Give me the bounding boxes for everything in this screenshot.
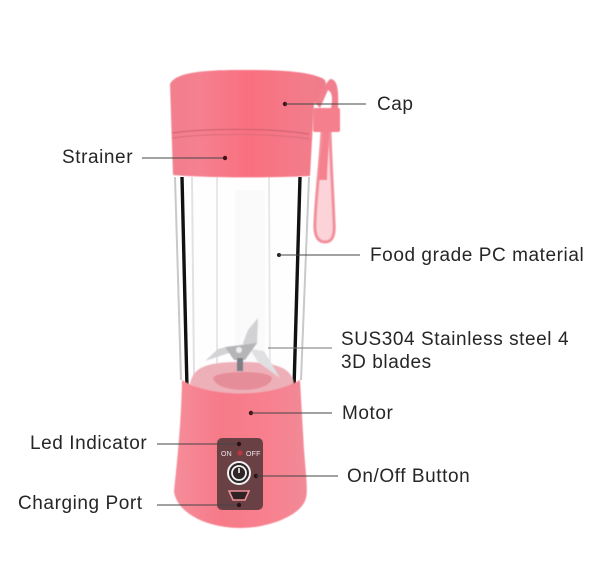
- label: blades: [268, 329, 569, 373]
- steel blades: [205, 318, 280, 378]
- strap: [312, 79, 340, 242]
- label: cap: [283, 94, 414, 115]
- label: charging port: [18, 493, 241, 514]
- icon: power button: [228, 462, 250, 484]
- label: cap: Cap: [377, 94, 414, 115]
- motor base: [174, 380, 307, 528]
- control panel: [217, 438, 263, 510]
- on off label: ON: [221, 451, 232, 458]
- label: on/off button: On/Off Button: [347, 466, 470, 487]
- label: blades: SUS304 Stainless steel 4: [341, 329, 569, 350]
- label: blades: 3D blades: [341, 352, 432, 373]
- blade hub inside jar: [190, 362, 294, 396]
- label: motor: [249, 403, 394, 424]
- control panel: OFF: [246, 451, 261, 458]
- label: strainer: Strainer: [62, 147, 133, 168]
- blender jar: [175, 177, 309, 388]
- label: charging port: Charging Port: [18, 493, 143, 514]
- label: led indicator: [30, 433, 241, 454]
- label: strainer: [62, 147, 227, 168]
- label: food grade material: [277, 245, 584, 266]
- label: on/off button: [254, 466, 470, 487]
- label: food grade material: Food grade PC material: [370, 245, 584, 266]
- label: motor: Motor: [342, 403, 394, 424]
- icon: charging port: [229, 491, 249, 500]
- cap and strainer: [170, 70, 326, 177]
- label: led indicator: Led Indicator: [30, 433, 147, 454]
